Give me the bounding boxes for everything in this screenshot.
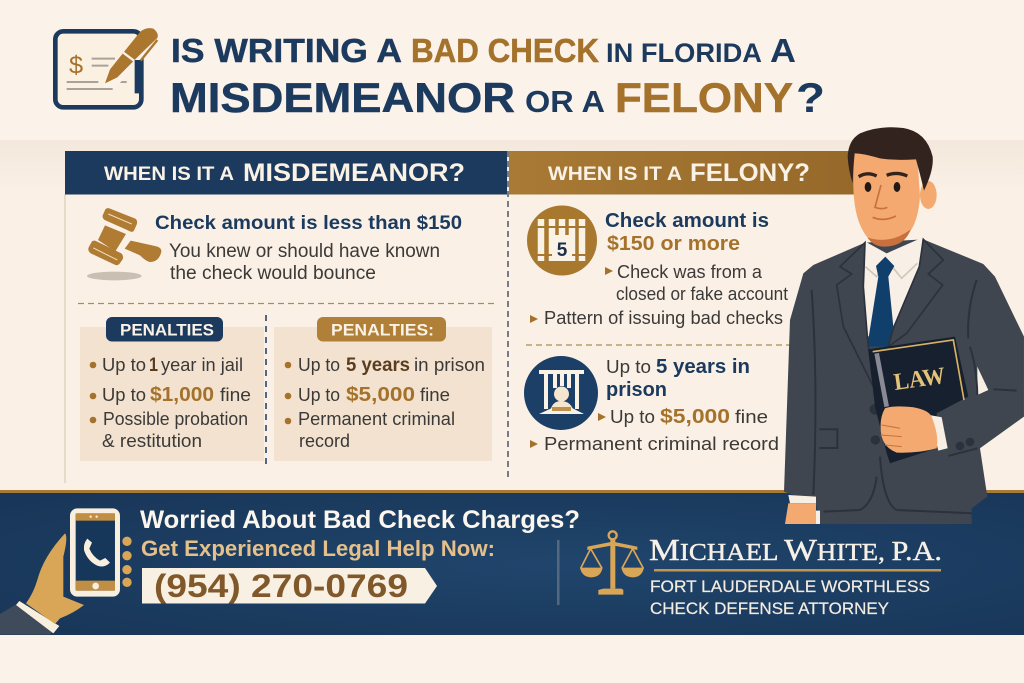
felony penalties: fine <box>735 406 768 427</box>
neck and face <box>853 153 920 247</box>
firm name and tagline: CHECK DEFENSE ATTORNEY <box>650 599 889 618</box>
holding hand and cuff <box>929 415 948 451</box>
title: BAD CHECK <box>411 32 599 69</box>
penalties box: felony summary: record <box>299 430 350 451</box>
title: IS WRITING A <box>171 32 402 69</box>
icon: jail bars with 5: 5 <box>557 240 568 261</box>
penalties box: misdemeanor <box>80 317 264 461</box>
phone number: (954) 270-0769 <box>154 568 408 604</box>
penalties badge gold <box>317 317 446 342</box>
panel: misdemeanor <box>65 151 507 483</box>
call to action <box>140 506 580 604</box>
title: A <box>770 32 796 69</box>
penalties box: felony summary: $5,000 <box>346 384 415 406</box>
icon: check and pen: $ <box>69 51 83 79</box>
felony criteria <box>530 209 788 328</box>
shirt <box>863 237 923 337</box>
felony penalties: $5,000 <box>660 406 730 428</box>
penalties box: felony summary: Up to <box>298 384 340 405</box>
misdemeanor heading: WHEN IS IT A <box>104 163 234 185</box>
felony heading: WHEN IS IT A <box>548 163 682 185</box>
icon: scales of justice <box>580 531 644 595</box>
penalties box: felony summary: 5 years <box>346 355 410 376</box>
penalties badge navy: PENALTIES <box>120 320 214 340</box>
law book <box>868 337 968 463</box>
misdemeanor heading: MISDEMEANOR? <box>243 159 465 187</box>
felony criteria: Pattern of issuing bad checks <box>544 307 783 328</box>
title: ? <box>796 74 825 121</box>
title: IN FLORIDA <box>606 38 762 68</box>
title: MISDEMEANOR <box>170 74 515 121</box>
penalties box: felony summary: fine <box>420 384 450 405</box>
penalties badge navy <box>106 317 223 342</box>
penalties box: misdemeanor: Up to <box>102 384 146 405</box>
penalties box: misdemeanor: & restitution <box>102 430 202 451</box>
icon: prisoner behind bars <box>524 356 598 430</box>
felony heading: FELONY? <box>690 159 810 187</box>
tie <box>867 257 894 347</box>
content band background <box>0 140 1024 490</box>
felony criteria: closed or fake account <box>616 283 788 304</box>
call to action: Get Experienced Legal Help Now: <box>141 536 495 561</box>
penalties box: felony summary: Permanent criminal <box>298 408 455 429</box>
suit <box>784 239 1024 524</box>
felony penalties: 5 years in <box>656 356 750 378</box>
misdemeanor criteria: You knew or should have known <box>169 241 440 262</box>
felony penalties: Up to <box>610 406 655 427</box>
misdemeanor criteria: Check amount is less than $150 <box>155 212 462 234</box>
penalties badge gold: PENALTIES: <box>331 320 434 340</box>
law book: LAW <box>892 363 947 396</box>
title <box>170 32 825 121</box>
call to action: Worried About Bad Check Charges? <box>140 506 580 534</box>
penalties box: misdemeanor: fine <box>220 384 251 405</box>
felony heading <box>509 151 854 194</box>
penalties box: misdemeanor: 1 <box>149 355 158 376</box>
icon: hand holding phone <box>0 508 132 635</box>
penalties box: misdemeanor: $1,000 <box>150 384 214 406</box>
facial features <box>859 173 907 177</box>
firm name and tagline: FORT LAUDERDALE WORTHLESS <box>650 577 930 596</box>
misdemeanor heading <box>65 151 507 194</box>
felony criteria: Check amount is <box>605 209 769 232</box>
icon: jail bars with 5 <box>527 206 597 276</box>
misdemeanor criteria: the check would bounce <box>170 263 376 284</box>
felony penalties <box>530 356 779 454</box>
felony penalties: prison <box>606 379 667 401</box>
penalties box: misdemeanor: Up to <box>102 354 146 375</box>
firm name and tagline: MICHAEL WHITE, P.A. <box>649 532 942 567</box>
felony criteria: $150 or more <box>607 232 740 255</box>
bottom banner <box>0 490 1024 635</box>
penalties box: misdemeanor: Possible probation <box>103 408 248 429</box>
penalties box: felony summary: Up to <box>298 354 340 375</box>
title: OR A <box>525 84 605 119</box>
icon: check and pen <box>55 20 164 107</box>
felony criteria: Check was from a <box>617 261 763 282</box>
felony penalties: Up to <box>606 356 651 377</box>
hair <box>848 127 933 191</box>
left cuff and hand <box>788 495 816 503</box>
penalties box: misdemeanor: year in jail <box>161 354 243 375</box>
lapels <box>837 243 873 387</box>
title: FELONY <box>615 74 793 121</box>
penalties box: felony summary: in prison <box>414 354 485 375</box>
attorney illustration <box>784 127 1024 524</box>
misdemeanor criteria <box>155 212 462 284</box>
icon: gavel <box>87 208 161 280</box>
panel: felony <box>509 151 854 454</box>
felony penalties: Permanent criminal record <box>544 433 779 454</box>
penalties box: felony summary <box>274 317 492 461</box>
firm name and tagline <box>649 532 942 618</box>
